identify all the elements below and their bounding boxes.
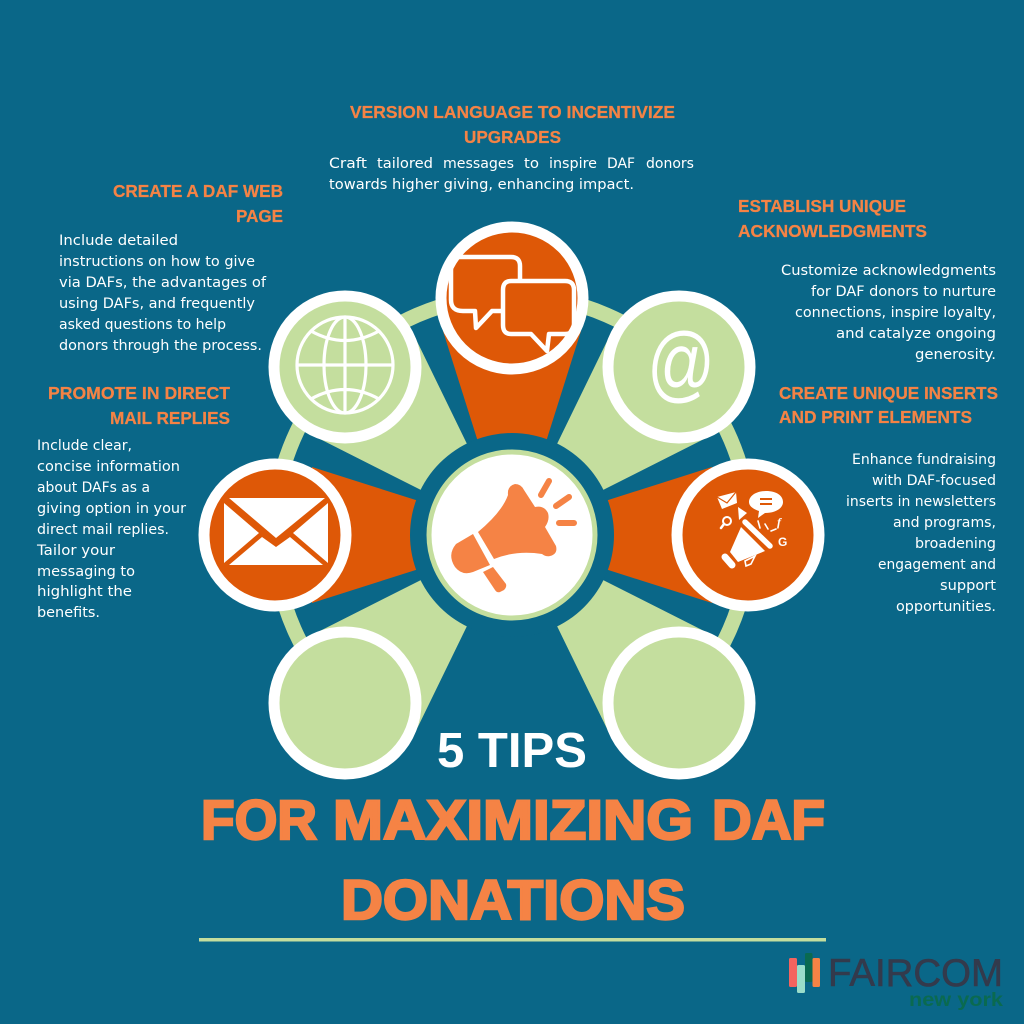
body text: giving option in your (37, 501, 186, 517)
title line: for maximizing DAF (201, 788, 825, 851)
heading (779, 383, 998, 427)
body text (846, 452, 997, 615)
body text (36, 438, 186, 621)
icon: center megaphone (451, 481, 574, 592)
spoke: bottom left (308, 580, 467, 739)
body text: Include clear, (37, 438, 132, 454)
heading (350, 102, 675, 147)
spoke: top left (308, 331, 467, 490)
body text: support (940, 578, 997, 594)
body text: Tailor your (36, 543, 115, 559)
logo: Faircom New York (789, 952, 1003, 1011)
heading: ACKNOWLEDGMENTS (738, 221, 927, 241)
body text: tailored (377, 156, 433, 172)
logo bars (789, 953, 820, 993)
node: top orange circle (441, 227, 583, 369)
body text: opportunities. (896, 599, 996, 615)
node: top right circle (608, 296, 750, 438)
heading: AND PRINT ELEMENTS (779, 407, 972, 427)
spoke: right orange (602, 467, 712, 603)
spoke: bottom right (557, 580, 716, 739)
heading: ESTABLISH UNIQUE (738, 196, 906, 216)
icon: chat bubbles (451, 257, 574, 351)
body text: asked questions to help (59, 317, 226, 333)
title line: for maximizing DAF: DAF (712, 788, 825, 851)
icon: envelope (224, 498, 328, 565)
body text: DAF (607, 156, 635, 172)
body text: Customize acknowledgments (781, 263, 996, 279)
spoke: left orange (312, 467, 422, 603)
spoke: top right (557, 331, 716, 490)
icon: digital marketing megaphone: f (777, 515, 782, 529)
title line: for maximizing DAF: MAXIMIZING (333, 788, 693, 851)
logo subtitle: new york (909, 990, 1003, 1011)
icon: globe (297, 317, 393, 413)
body text: using DAFs, and frequently (59, 296, 255, 312)
body text: instructions on how to give (59, 254, 255, 270)
center gap ring (410, 433, 614, 637)
body text: towards higher giving, enhancing impact. (329, 177, 634, 193)
body text: direct mail replies. (37, 522, 169, 538)
node: right orange circle (677, 464, 819, 606)
spoke: top orange (443, 331, 581, 445)
title line: for maximizing DAF: FOR (201, 788, 317, 851)
body text: benefits. (37, 605, 100, 621)
title line: 5 tips: 5 TIPS (437, 724, 587, 778)
body text: connections, inspire loyalty, (795, 305, 996, 321)
heading: MAIL REPLIES (110, 408, 230, 428)
title (201, 724, 825, 931)
node: left orange circle (204, 464, 346, 606)
tip: establish unique acknowledgments (738, 196, 996, 363)
heading: CREATE A DAF WEB (113, 181, 283, 201)
body text: broadening (915, 536, 996, 552)
body text (329, 156, 694, 193)
body text: and catalyze ongoing (836, 326, 996, 342)
body text: with DAF-focused (872, 473, 996, 489)
body text: donors (646, 156, 694, 172)
body text: Craft (329, 156, 368, 172)
heading (48, 383, 230, 428)
hub diagram (204, 227, 819, 774)
tip: version language (329, 102, 694, 193)
heading: VERSION LANGUAGE TO INCENTIVIZE (350, 102, 675, 122)
node: top left circle (274, 296, 416, 438)
heading: PROMOTE IN DIRECT (48, 383, 230, 403)
body text: highlight the (37, 584, 132, 600)
center circle (429, 452, 595, 618)
icon: digital marketing megaphone: G (778, 535, 787, 549)
heading: CREATE UNIQUE INSERTS (779, 383, 998, 403)
body text: donors through the process. (59, 338, 262, 354)
heading: UPGRADES (464, 127, 561, 147)
body text: for DAF donors to nurture (811, 284, 996, 300)
node: bottom left circle (274, 632, 416, 774)
body text: to (524, 156, 539, 172)
title line: donations: DONATIONS (341, 868, 685, 931)
body text: engagement and (878, 557, 996, 573)
outer green ring (274, 295, 750, 703)
icon: digital marketing megaphone (717, 491, 787, 566)
node: bottom right circle (608, 632, 750, 774)
title underline (199, 938, 826, 942)
tip: promote in direct mail replies (36, 383, 230, 621)
body text: concise information (37, 459, 180, 475)
icon: at sign: @ (646, 316, 714, 410)
heading (113, 181, 283, 226)
body text: via DAFs, the advantages of (59, 275, 267, 291)
body text: Include detailed (59, 233, 178, 249)
body text: inserts in newsletters (846, 494, 996, 510)
body text: inspire (549, 156, 597, 172)
body text: about DAFs as a (37, 480, 150, 496)
body text (59, 233, 267, 354)
heading (738, 196, 927, 241)
body text: Enhance fundraising (852, 452, 996, 468)
tip: create unique inserts (779, 383, 998, 615)
logo wordmark: FAIRCOM (828, 952, 1003, 995)
heading: PAGE (236, 206, 283, 226)
tip: create a DAF web page (59, 181, 283, 354)
body text: messaging to (37, 564, 135, 580)
body text: and programs, (893, 515, 996, 531)
body text: messages (443, 156, 514, 172)
body text: generosity. (915, 347, 996, 363)
body text (781, 263, 996, 363)
